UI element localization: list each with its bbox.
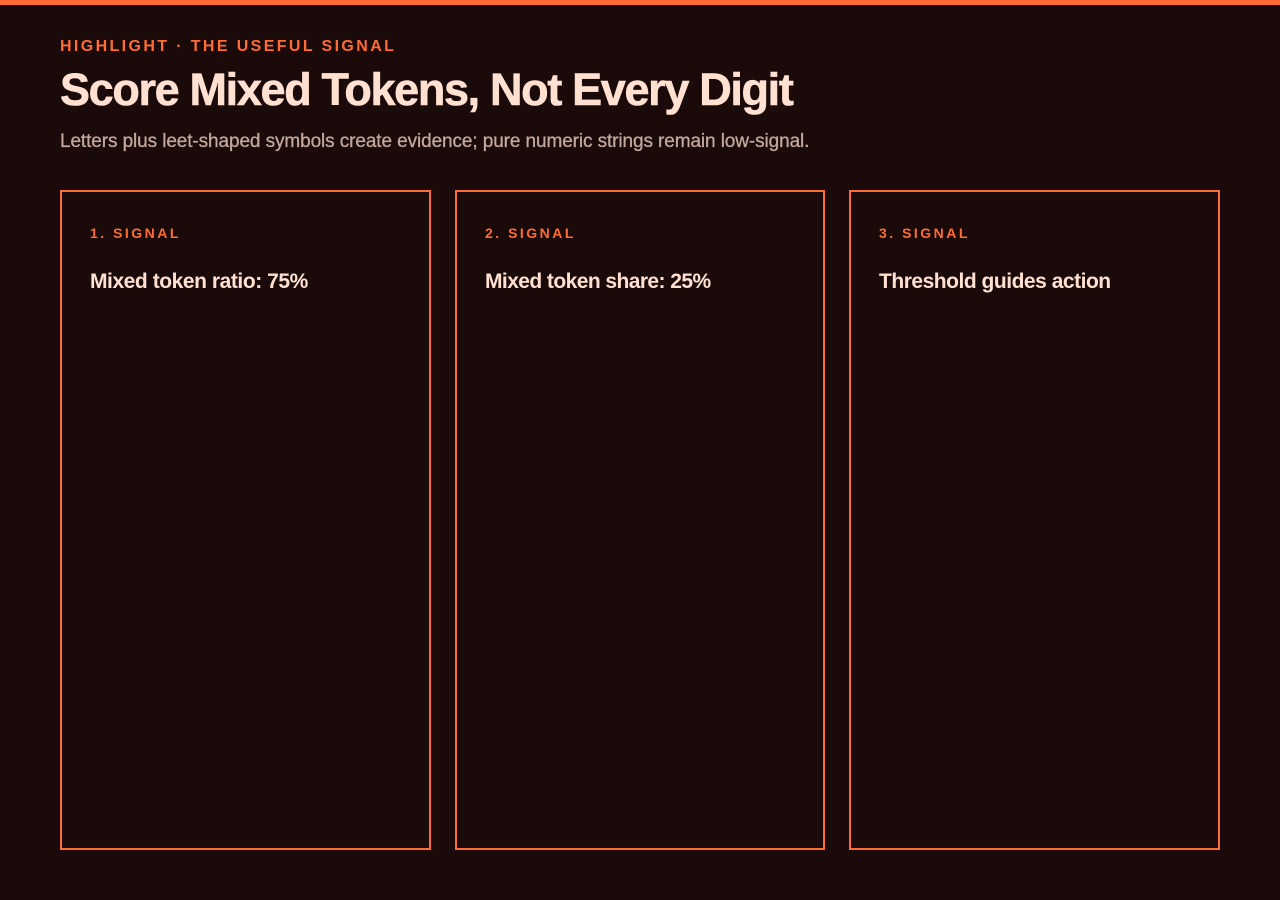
panel 1 text: Mixed token ratio: 75% xyxy=(90,270,308,293)
subtitle: Letters plus leet-shaped symbols create evidence; pure numeric strings remain low-signal. xyxy=(60,131,809,152)
title: Score Mixed Tokens, Not Every Digit xyxy=(60,64,792,115)
panel: signal 3 xyxy=(849,190,1220,850)
panel 1 label: 1. SIGNAL xyxy=(90,225,181,241)
panel 3 text: Threshold guides action xyxy=(879,270,1111,293)
eyebrow: HIGHLIGHT · THE USEFUL SIGNAL xyxy=(60,38,396,55)
panel: signal 1 xyxy=(60,190,431,850)
panel: signal 2 xyxy=(455,190,825,850)
top accent bar xyxy=(0,0,1280,5)
panel 2 label: 2. SIGNAL xyxy=(485,225,576,241)
panel 2 text: Mixed token share: 25% xyxy=(485,270,711,293)
panel 3 label: 3. SIGNAL xyxy=(879,225,970,241)
